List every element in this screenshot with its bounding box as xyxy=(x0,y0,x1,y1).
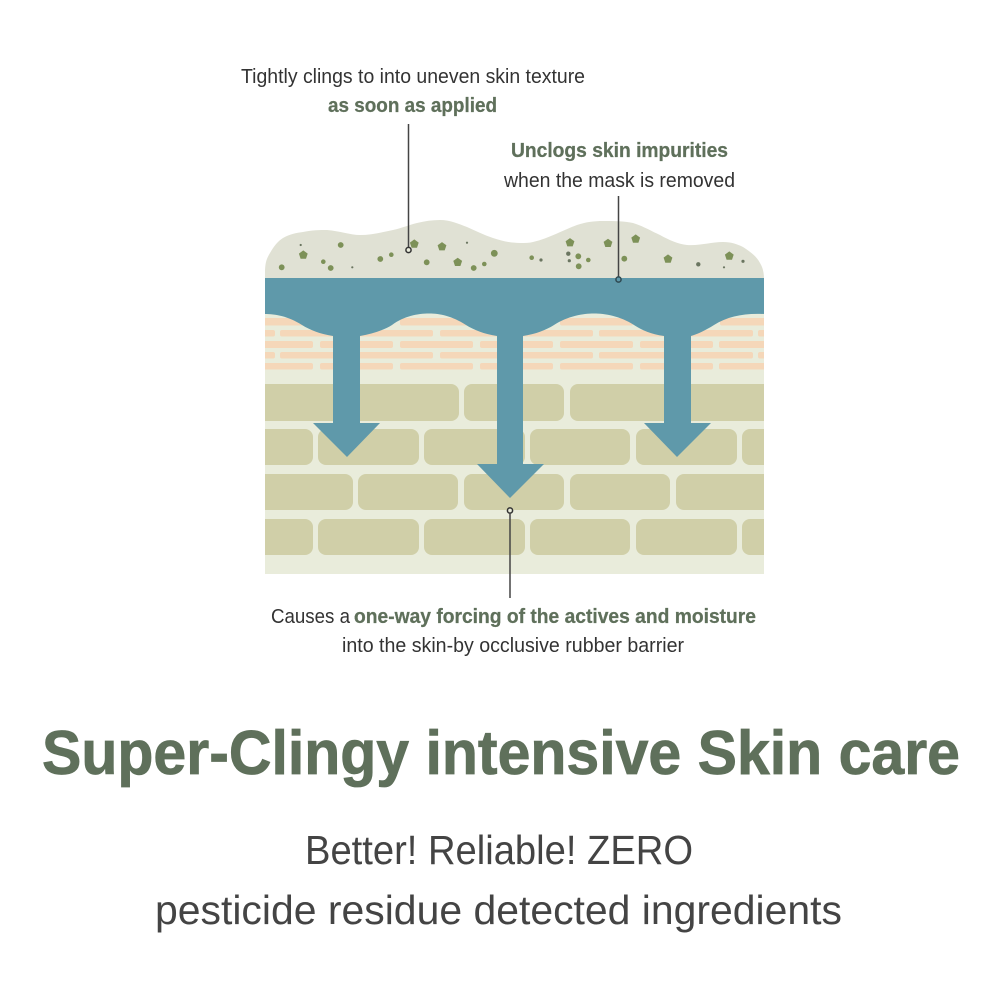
callout: clings to skin texture: Tightly clings to into uneven skin texture xyxy=(241,66,585,88)
subtitle: Better! Reliable! ZERO xyxy=(305,827,693,873)
lower skin layer: olive bricks xyxy=(265,384,764,555)
callout: unclogs impurities: Unclogs skin impurities xyxy=(511,140,728,162)
arrow: left xyxy=(313,330,380,457)
callout: unclogs impurities: when the mask is removed xyxy=(503,170,735,192)
tiny dark particles xyxy=(300,242,745,268)
callout: one-way forcing: into the skin-by occlusive rubber barrier xyxy=(342,635,684,657)
title: Super-Clingy intensive Skin care xyxy=(42,719,960,788)
callout: clings to skin texture: as soon as applied xyxy=(328,95,497,117)
callout: clings to skin texture xyxy=(241,66,585,117)
leader line: barrier xyxy=(616,196,621,282)
subtitle xyxy=(155,827,842,933)
leader line: arrow tip xyxy=(507,508,513,598)
callout: one-way forcing: one-way forcing of the actives and moisture xyxy=(354,606,756,628)
upper skin layer: peach cells xyxy=(265,318,764,370)
leader line: foam xyxy=(406,124,411,253)
arrow: centre xyxy=(477,330,544,498)
callout: unclogs impurities xyxy=(503,140,735,192)
subtitle: pesticide residue detected ingredients xyxy=(155,887,842,933)
callout: one-way forcing: Causes a xyxy=(271,606,351,628)
impurity particles xyxy=(279,234,734,271)
skin base layer xyxy=(265,300,764,574)
skin cross-section diagram xyxy=(265,220,764,574)
callout: one-way forcing xyxy=(271,606,756,657)
blue occlusive barrier band xyxy=(265,278,764,336)
infographic canvas xyxy=(43,68,958,932)
arrow: right xyxy=(644,330,711,457)
mask foam layer xyxy=(265,220,764,279)
